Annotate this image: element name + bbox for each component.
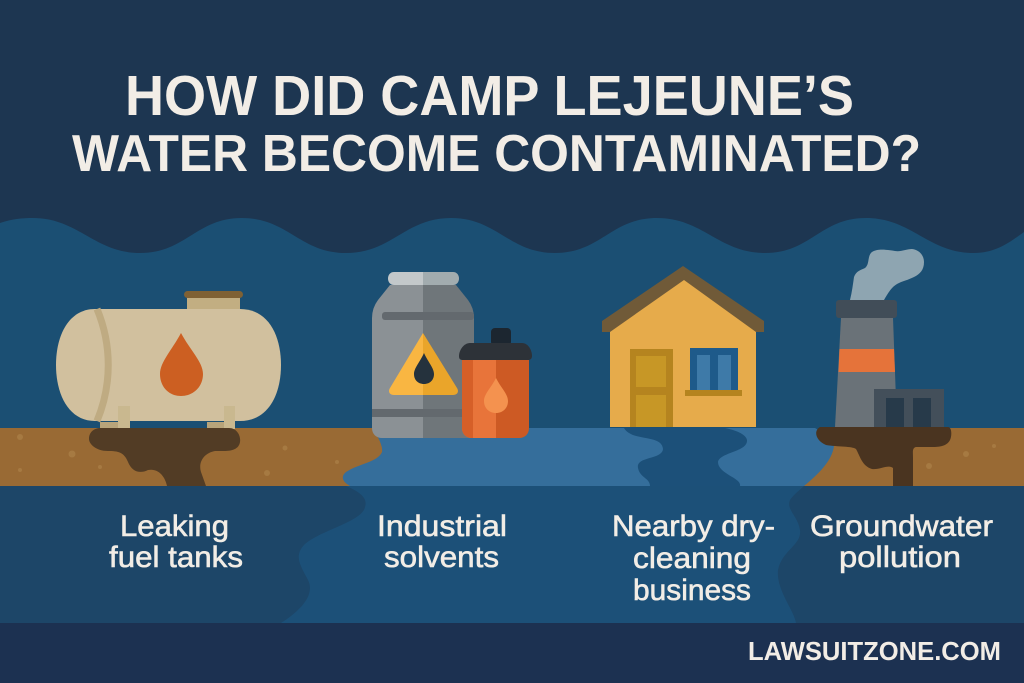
label: nearby dry-cleaning business: Nearby dry- — [612, 510, 775, 543]
label: industrial solvents: Industrial — [377, 510, 507, 543]
window — [685, 348, 742, 396]
icon: smokestack factory — [816, 249, 951, 486]
tank legs — [100, 406, 235, 429]
title: HOW DID CAMP LEJEUNE’S — [125, 64, 854, 128]
icon: leaking fuel tank — [56, 291, 281, 486]
house wall — [610, 279, 756, 427]
roof — [602, 266, 764, 332]
label: groundwater pollution: pollution — [839, 541, 961, 574]
lower caption band — [0, 486, 1024, 623]
label: leaking fuel tanks — [109, 510, 243, 574]
label: nearby dry-cleaning business: cleaning — [633, 542, 751, 575]
smoke — [850, 249, 924, 300]
hazard triangle — [389, 333, 458, 395]
orange solvent can — [459, 328, 532, 438]
door — [630, 349, 673, 427]
label: groundwater pollution — [810, 510, 993, 574]
icon: industrial solvent containers — [372, 272, 532, 438]
pollution stain — [816, 427, 951, 486]
icon: dry-cleaning house — [602, 266, 764, 427]
fuel leak stain — [89, 428, 240, 486]
footer website text: LAWSUITZONE.COM — [748, 636, 1001, 666]
label: nearby dry-cleaning business — [612, 510, 775, 607]
drop on tank — [160, 333, 203, 396]
label: industrial solvents — [377, 510, 507, 574]
ground and flooded water strip — [0, 428, 1024, 486]
title: WATER BECOME CONTAMINATED? — [72, 125, 921, 183]
tank fill cap — [184, 291, 243, 310]
tank body — [56, 309, 281, 421]
label: industrial solvents: solvents — [384, 541, 499, 574]
water background with wavy top — [0, 218, 1024, 486]
title — [72, 64, 921, 183]
chimney — [835, 318, 897, 427]
solvent barrel — [372, 272, 474, 438]
label: leaking fuel tanks: Leaking — [120, 510, 229, 543]
label: leaking fuel tanks: fuel tanks — [109, 541, 243, 574]
footer bar — [0, 623, 1024, 683]
label: nearby dry-cleaning business: business — [633, 574, 751, 607]
factory building — [874, 389, 944, 427]
label: groundwater pollution: Groundwater — [810, 510, 993, 543]
